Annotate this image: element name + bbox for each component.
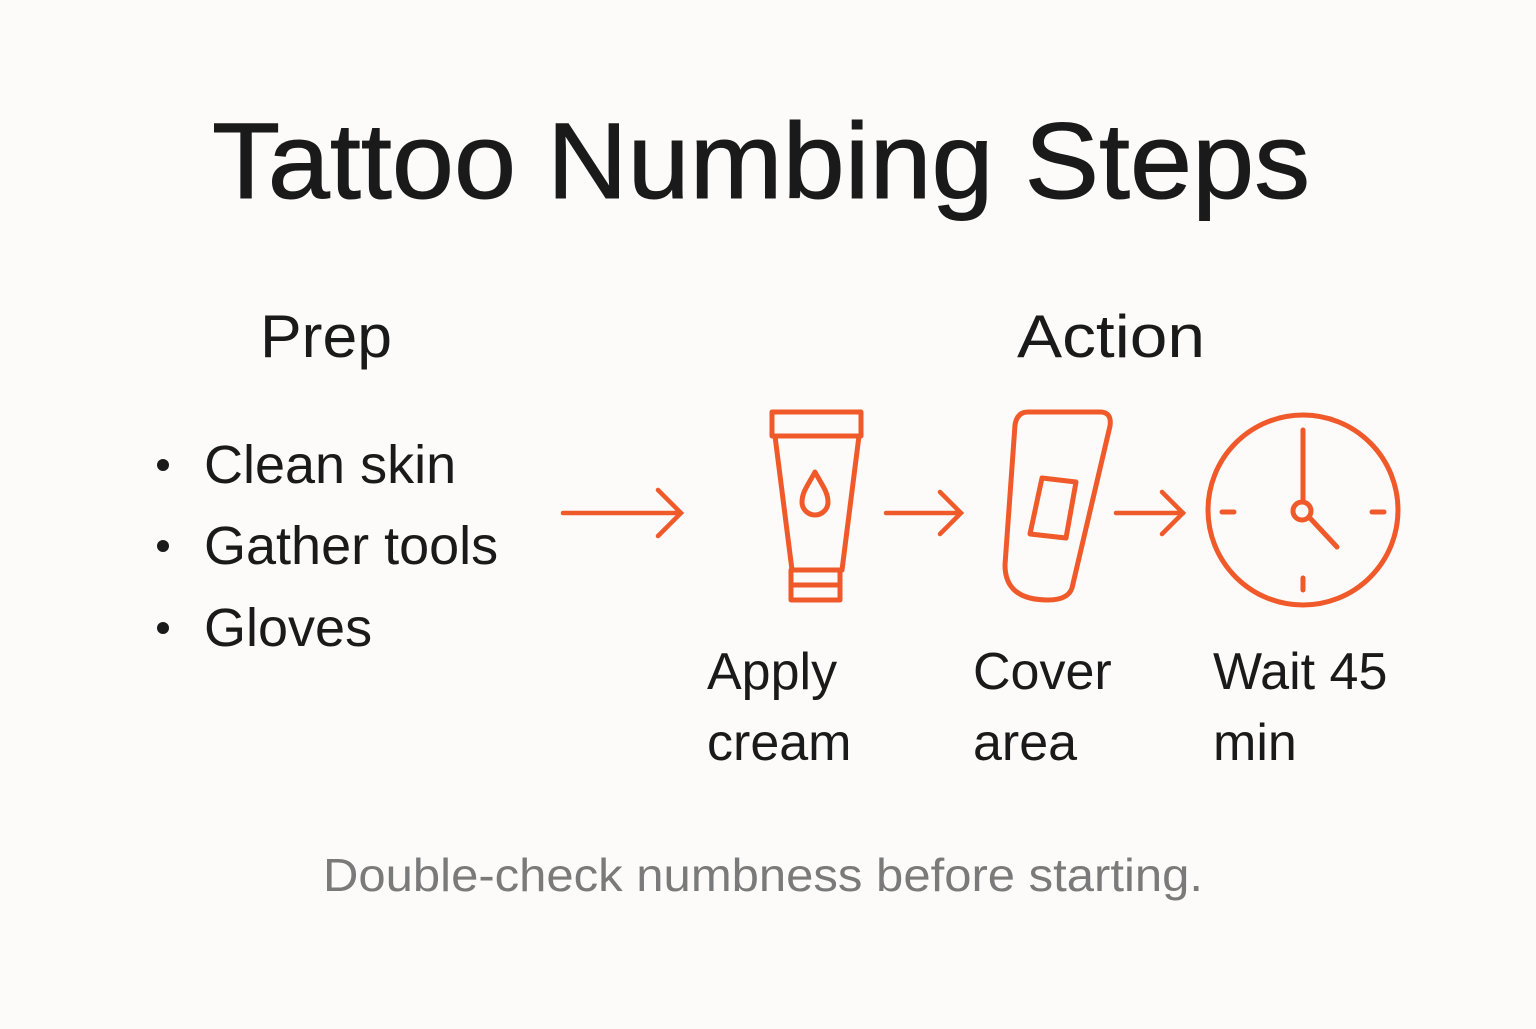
label: wait 45 min	[1213, 643, 1387, 772]
prep list: Gather tools	[204, 516, 498, 576]
arrow: apply to cover	[886, 492, 961, 534]
prep list: Clean skin	[204, 435, 456, 495]
icon: clock	[1208, 415, 1398, 605]
prep list	[157, 435, 498, 658]
heading: Prep: Prep	[260, 303, 392, 370]
label: wait 45 min: Wait 45	[1213, 643, 1387, 701]
label: cover area: area	[973, 714, 1077, 772]
heading: Action: Action	[1017, 303, 1205, 370]
label: apply cream	[707, 643, 851, 772]
label: cover area: Cover	[973, 643, 1112, 701]
icon: cream tube	[772, 412, 861, 600]
label: apply cream: cream	[707, 714, 851, 772]
arrow: cover to wait	[1116, 492, 1183, 534]
footer note: Double-check numbness before starting.	[323, 849, 1203, 901]
label: cover area	[973, 643, 1112, 772]
label: apply cream: Apply	[707, 643, 837, 701]
title: Tattoo Numbing Steps	[212, 100, 1310, 221]
icon: patch	[1005, 412, 1110, 600]
arrow: prep to action	[563, 490, 681, 536]
label: wait 45 min: min	[1213, 714, 1297, 772]
prep list: Gloves	[204, 598, 372, 658]
